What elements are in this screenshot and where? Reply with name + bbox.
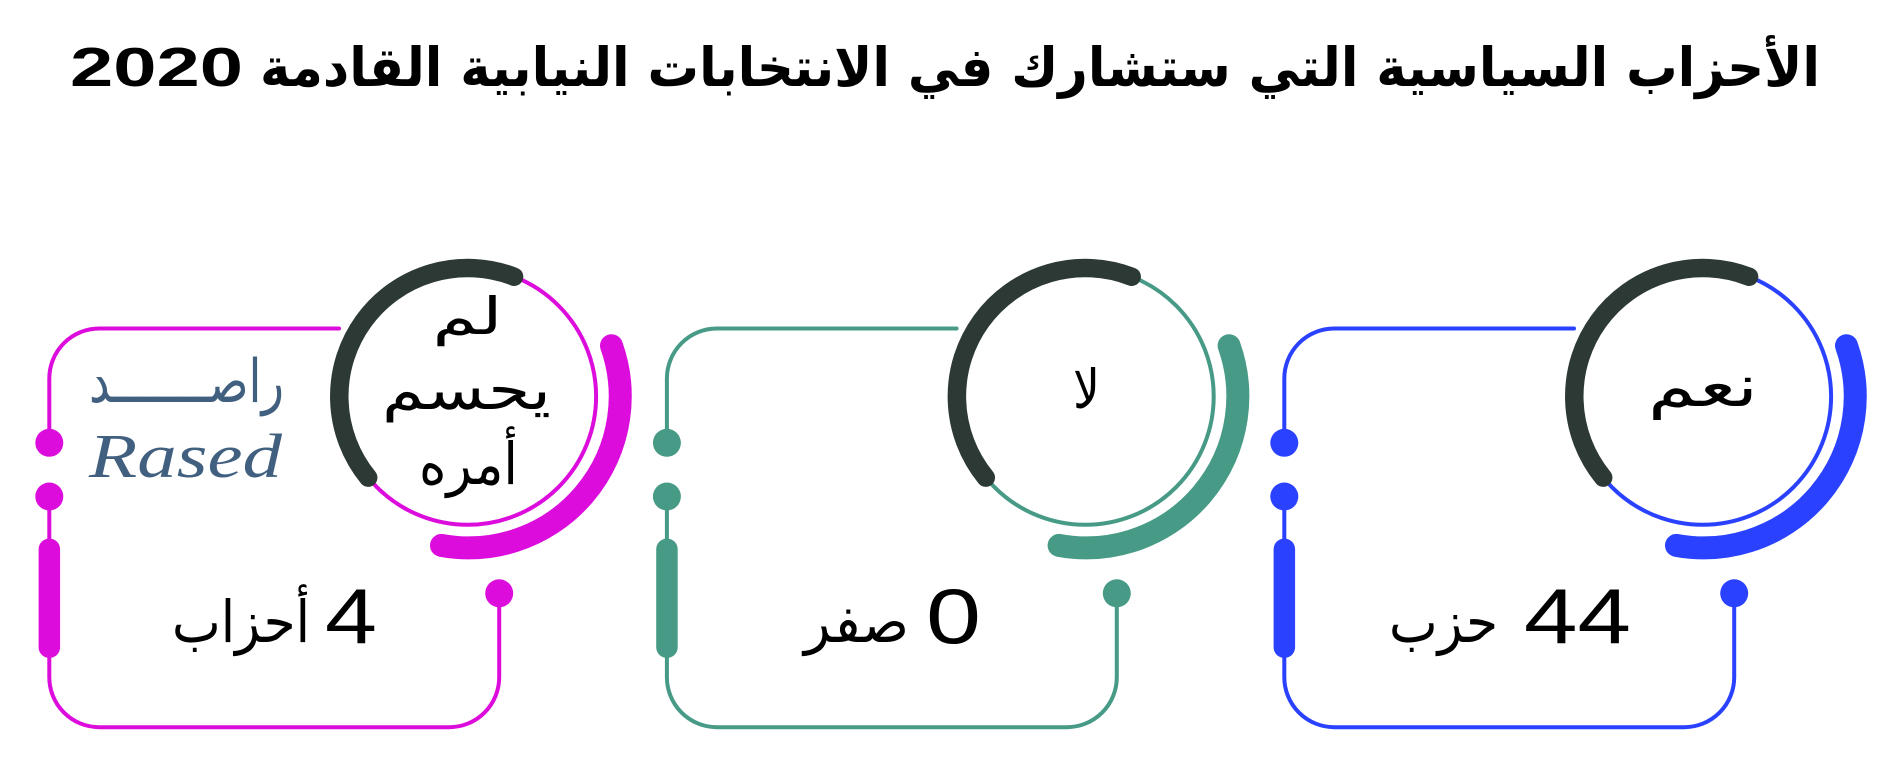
green frame dots and pill (653, 429, 1131, 658)
logo: Rased: Rased (88, 423, 283, 491)
panel: undecided parties (magenta) (35, 268, 620, 727)
value: 0 zero (801, 572, 981, 660)
value: 44 parties (1389, 572, 1631, 660)
title: الأحزاب السياسية التي ستشارك في الانتخابات النيابية القادمة (260, 35, 1820, 99)
title: 2020 (70, 36, 243, 98)
panel: yes parties (blue) (1270, 268, 1855, 727)
magenta ring (339, 268, 596, 525)
logo: Rased (88, 347, 284, 491)
dark arc (339, 268, 514, 478)
circle label: undecided: أمره (419, 426, 518, 499)
green thick arc (1059, 346, 1238, 548)
green frame line (667, 328, 1117, 727)
value: 4 parties (172, 572, 377, 660)
blue thick arc (1676, 346, 1855, 548)
value: 4 parties: أحزاب (172, 584, 310, 657)
circle label: no: لا (1073, 358, 1100, 421)
panel: no parties (green) (653, 268, 1238, 727)
value: 4 parties: 4 (325, 572, 377, 660)
magenta frame dots and pill (35, 429, 513, 658)
dark arc (1574, 268, 1749, 478)
green ring (957, 268, 1214, 525)
circle label: undecided (382, 288, 551, 499)
circle label: undecided: يحسم (382, 358, 551, 423)
value: 44 parties: 44 (1524, 572, 1631, 660)
logo: Rased: راصـــــــد (89, 347, 284, 417)
magenta thick arc (442, 346, 620, 548)
circle label: yes: نعم (1648, 352, 1758, 420)
circle label: undecided: لم (432, 288, 502, 347)
blue ring (1574, 268, 1831, 525)
blue frame dots and pill (1270, 429, 1748, 658)
value: 0 zero: صفر (801, 588, 909, 657)
dark arc (957, 268, 1132, 478)
magenta frame line (49, 328, 499, 727)
value: 44 parties: حزب (1389, 588, 1498, 657)
blue frame line (1284, 328, 1734, 727)
value: 0 zero: 0 (926, 572, 981, 660)
